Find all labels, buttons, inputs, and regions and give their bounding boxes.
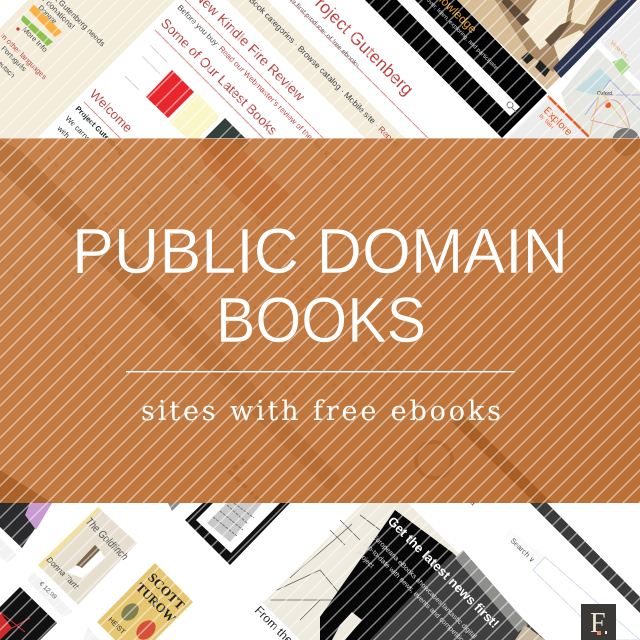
book cover: Scott Turow: SCOTT <box>145 570 188 613</box>
price tag: 12.99 <box>27 572 73 617</box>
ghost: red book below banner <box>195 140 290 222</box>
banner top edge <box>0 138 640 139</box>
book cover: Scott Turow: HEIST <box>107 616 127 637</box>
book cover: The Goldfinch <box>38 507 137 605</box>
search icon <box>507 102 516 112</box>
price tag stub <box>83 627 100 640</box>
explore text: by Sale <box>538 113 555 130</box>
sidebar donation text <box>0 0 107 82</box>
yellow book cover <box>169 93 220 143</box>
heading: Welcome: Welcome <box>87 87 136 135</box>
divider line <box>126 371 515 372</box>
sidebar donation text: Português <box>0 45 27 73</box>
title: PUBLIC DOMAIN <box>72 215 568 287</box>
beige navigation band <box>227 0 407 140</box>
sidebar donation text: Donate <box>37 4 58 25</box>
Welcome paragraph: Project Gutenberg <box>74 104 127 157</box>
ghost: circle <box>416 442 452 478</box>
illustration with dark overlay <box>263 503 545 640</box>
Welcome paragraph: with <box>55 123 71 140</box>
gray panel with link <box>600 0 640 82</box>
red book cover <box>146 70 194 118</box>
ghost: continuation band <box>160 300 340 492</box>
sidebar donation text: In other languages <box>0 31 49 82</box>
dark book cover with pink <box>0 470 52 548</box>
red rules <box>84 0 430 140</box>
book cover: The Goldfinch: The Goldfinch <box>83 516 130 563</box>
title <box>72 215 568 356</box>
pause control <box>521 52 534 64</box>
ghost: device outline <box>230 460 262 503</box>
small label above search: a <box>469 499 476 507</box>
search dropdown <box>505 530 552 572</box>
ghost: dark band lower right <box>453 414 552 503</box>
sidebar donation text: More Info <box>21 25 49 54</box>
book cover: The Goldfinch: Donna Tartt <box>45 555 81 591</box>
callout: Get the latest news first!: Get the latest news first! <box>385 514 502 631</box>
search dropdown: Search ∨ <box>509 536 537 565</box>
price tag: 12.99: € 12.99 <box>38 580 58 601</box>
tablet device <box>168 503 290 565</box>
logo: F <box>590 608 606 639</box>
sepia photo <box>457 0 637 90</box>
ghost shapes under banner <box>0 140 552 503</box>
gray book cover <box>125 45 168 90</box>
dark band <box>530 503 640 613</box>
price pill <box>0 538 17 563</box>
panel: top website screenshots <box>0 0 640 222</box>
explore text: Explore <box>541 105 575 138</box>
book cover: Scott Turow <box>97 563 193 640</box>
map <box>561 48 640 156</box>
map: Oxford <box>597 91 612 97</box>
ghost: long dark band <box>0 140 175 320</box>
panel: bottom website screenshots <box>0 470 640 640</box>
heading: Some of Our Latest Books: Some of Our Latest Books <box>158 16 281 138</box>
Welcome paragraph: We carry <box>64 114 91 142</box>
logo <box>581 604 616 640</box>
banner <box>0 138 640 503</box>
link text: View on... <box>609 40 632 63</box>
callout body text: Project <box>355 549 375 570</box>
orange divider <box>548 96 589 137</box>
review line: Before you buy: Read our Webmaster's review of the new Kindle <box>176 3 344 171</box>
search strip <box>397 0 520 116</box>
ghost: text rows <box>0 145 400 410</box>
book cover: Scott Turow: TUROW <box>133 580 179 625</box>
callout body text: Europeana eBooks showcases fantastic digital <box>371 533 478 640</box>
black book cover <box>0 587 57 640</box>
subtitle: sites with free ebooks <box>141 396 501 427</box>
title: BOOKS <box>216 284 426 356</box>
dark book cover <box>200 118 250 168</box>
search input <box>533 557 640 640</box>
black strip <box>365 0 547 138</box>
beige sidebar <box>0 0 175 140</box>
explore panel <box>505 96 592 140</box>
